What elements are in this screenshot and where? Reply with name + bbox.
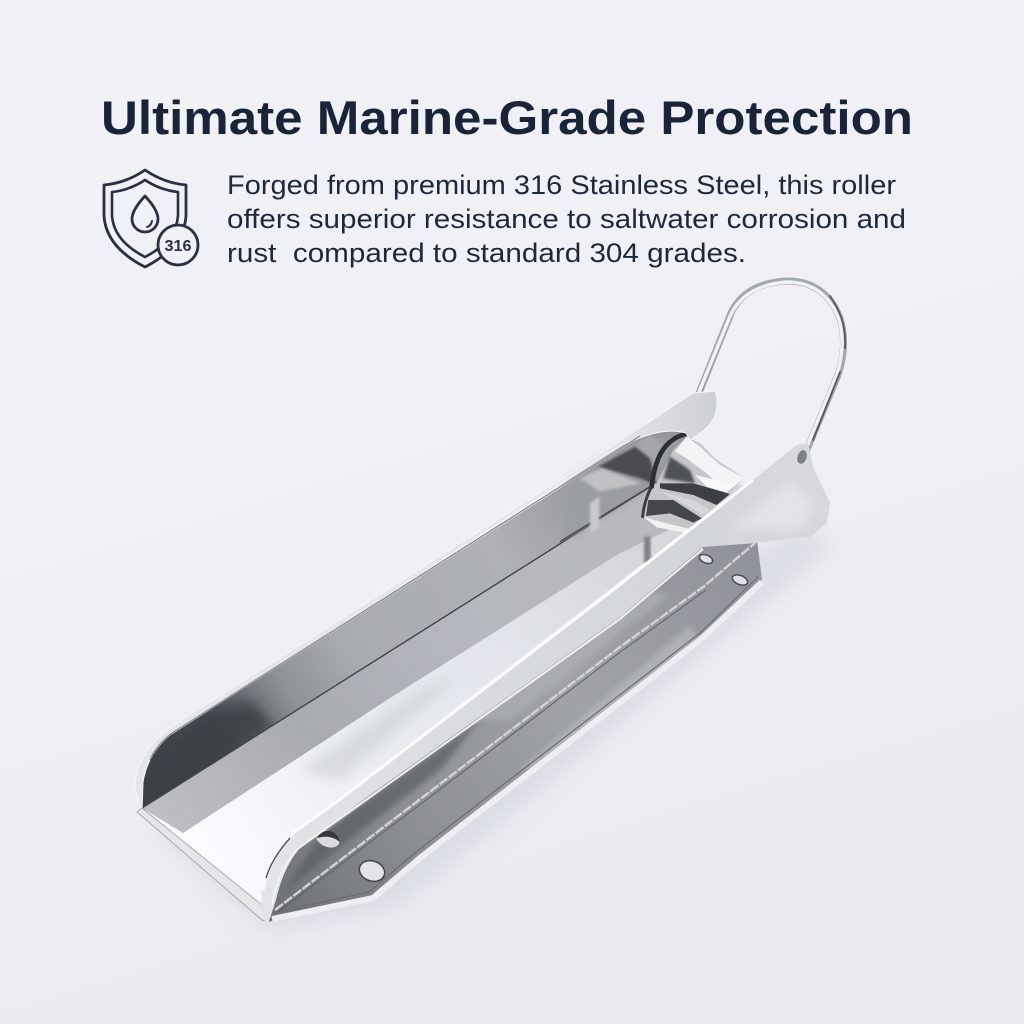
product: stainless steel bow roller (135, 281, 845, 930)
left inner wall (140, 425, 690, 808)
floor reflections near roller (590, 497, 675, 563)
right flange rim and ear (261, 443, 830, 924)
description text (227, 170, 906, 268)
dark roller ring (652, 433, 687, 487)
crease line (142, 487, 650, 808)
icon: shield with water drop and 316 badge (104, 170, 198, 267)
badge label: 316 (164, 238, 192, 255)
side flange reflections (285, 590, 700, 890)
trough floor (142, 485, 745, 912)
ear highlights (730, 480, 815, 530)
lower side flange (262, 535, 762, 922)
lower flange bright edge (272, 582, 762, 919)
front floor edge (137, 808, 268, 922)
description text: offers superior resistance to saltwater corrosion and (227, 204, 906, 234)
left wall rim and ear (135, 391, 717, 812)
wall reflections near roller (560, 433, 687, 542)
description text: rust compared to standard 304 grades. (227, 238, 746, 268)
title: Ultimate Marine-Grade Protection (101, 91, 913, 144)
grey reflection band (142, 487, 690, 833)
weld seam (275, 543, 755, 910)
roller spool (642, 437, 745, 533)
description text: Forged from premium 316 Stainless Steel, this roller (227, 170, 896, 200)
mounting holes (314, 553, 749, 885)
handle weld point (796, 449, 808, 465)
soft shadow (150, 525, 835, 930)
roller area detail (drawn in zoom-scale coordinates) (560, 433, 745, 563)
wire handle (699, 281, 845, 452)
